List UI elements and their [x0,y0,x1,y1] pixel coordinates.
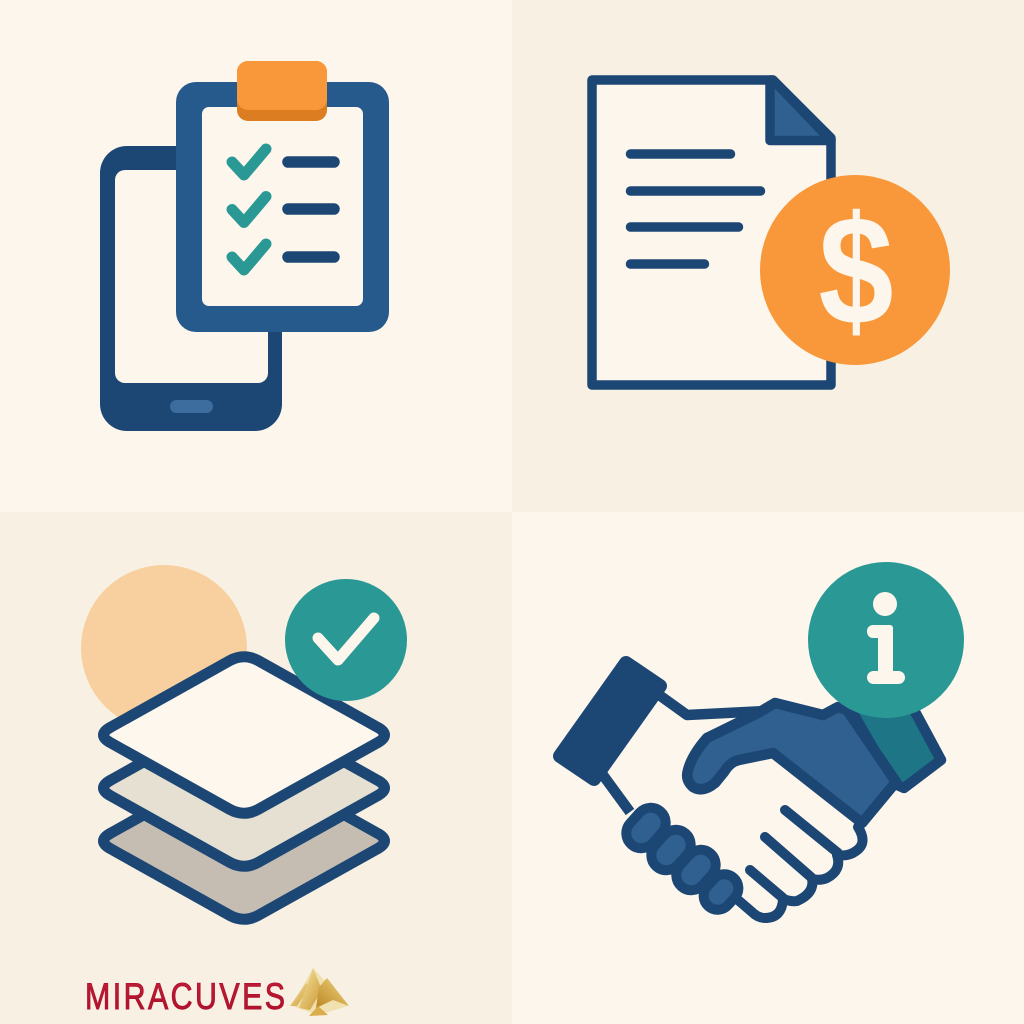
icon: phone [100,146,282,431]
icon: dollar coin [760,175,950,365]
icon: info badge [808,562,964,718]
white hand fingers outline [738,810,863,918]
icon: dollar coin: $ [818,183,894,357]
icon: invoice document with dollar coin [592,80,950,385]
logo mountain mark [290,968,349,1016]
icon: phone with checklist [100,61,389,431]
icon: teal check badge [285,579,407,701]
panel: top-right background [512,0,1024,512]
left shirt cuff [560,663,660,779]
teal cuff [850,708,941,788]
layer stack [104,657,384,919]
logo wordmark: MIRACUVES [85,976,287,1018]
icon: orange clip [237,61,327,121]
panel: top-left background [0,0,512,512]
panel: bottom-left background [0,512,512,1024]
icon: document [592,80,831,385]
panel: bottom-right background [512,512,1024,1024]
blue hand [687,703,896,823]
document text lines [630,154,760,264]
knuckles [620,802,744,915]
left arm outline [600,692,765,812]
logo: Miracuves [85,968,349,1018]
icon: clipboard [176,82,389,332]
decorative peach circle [81,565,247,731]
icon: layers with check badge [81,565,407,919]
icon: handshake with info badge [560,562,964,918]
checklist rows [232,149,334,270]
